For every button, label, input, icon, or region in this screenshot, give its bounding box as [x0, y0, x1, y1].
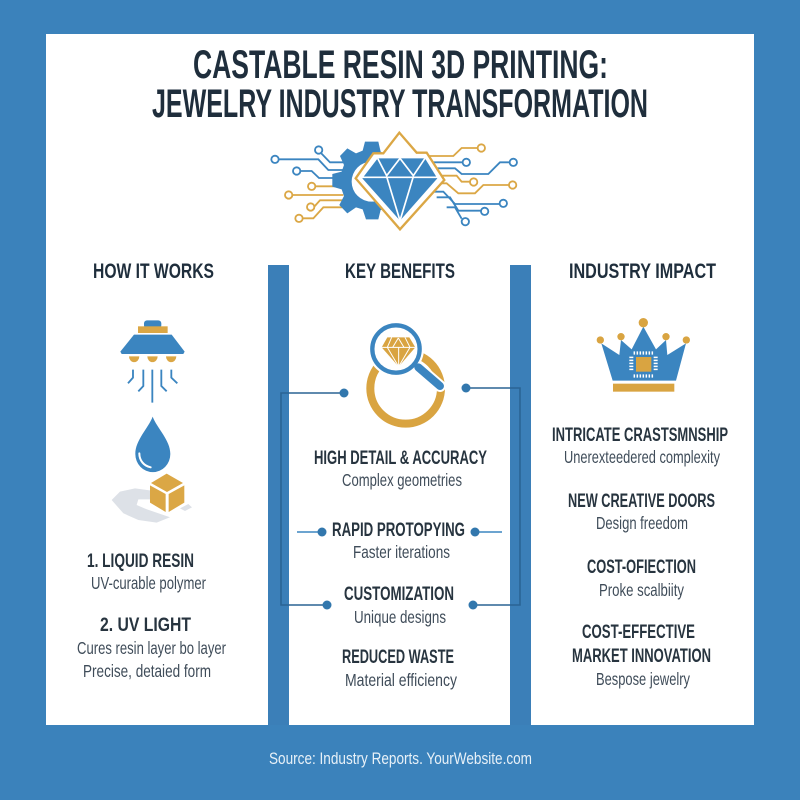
- text: how it works steps: UV-curable polymer: [91, 573, 206, 593]
- icon: uv lamp, resin drop and cube: [112, 320, 192, 523]
- text: industry impact list: Bespose jewelry: [596, 669, 690, 689]
- text: how it works steps: Cures resin layer bo layer: [77, 638, 226, 658]
- gold cube: [150, 474, 184, 512]
- gem: [361, 158, 439, 221]
- heading: key benefits: KEY BENEFITS: [345, 260, 455, 283]
- text: key benefits list: HIGH DETAIL & ACCURACY: [314, 447, 487, 469]
- gold circuit traces: [285, 144, 516, 222]
- icon: ring with magnifier: [368, 321, 441, 424]
- column divider right: [510, 265, 531, 725]
- text: industry impact list: Unerexteedered complexity: [564, 447, 720, 467]
- connector right: [462, 384, 520, 610]
- text: industry impact list: COST-OFIECTION: [587, 556, 696, 578]
- uv lamp: [120, 320, 185, 403]
- text: key benefits list: Material efficiency: [345, 670, 457, 690]
- magnifier: [368, 321, 424, 377]
- gear: [332, 142, 392, 219]
- gold ring: [370, 353, 441, 424]
- title: CASTABLE RESIN 3D PRINTING:: [193, 43, 608, 87]
- text: how it works steps: 2. UV LIGHT: [100, 614, 191, 636]
- text: industry impact list: NEW CREATIVE DOORS: [568, 490, 715, 512]
- column divider left: [268, 265, 289, 725]
- text: industry impact list: Design freedom: [596, 513, 688, 533]
- text: industry impact list: Proke scalbiity: [599, 580, 684, 600]
- text: how it works steps: Precise, detaied form: [83, 661, 211, 681]
- connector left: [281, 388, 348, 610]
- text: industry impact list: COST-EFFECTIVE: [582, 621, 695, 643]
- text: key benefits list: CUSTOMIZATION: [344, 583, 454, 605]
- text: key benefits list: [314, 447, 487, 690]
- text: key benefits list: REDUCED WASTE: [342, 646, 454, 668]
- text: how it works steps: [77, 550, 226, 681]
- small gold gem: [382, 337, 415, 367]
- text: key benefits list: Faster iterations: [353, 542, 450, 562]
- grey shadow: [112, 488, 192, 523]
- heading: how it works: HOW IT WORKS: [93, 260, 214, 283]
- icon: crown with chip: [597, 318, 690, 392]
- blue circuit traces: [271, 146, 517, 225]
- heading: industry impact: INDUSTRY IMPACT: [569, 260, 716, 283]
- text: industry impact list: MARKET INNOVATION: [572, 645, 711, 667]
- text: key benefits list: RAPID PROTOPYING: [332, 519, 465, 541]
- text: key benefits list: Complex geometries: [342, 470, 462, 490]
- icon: gear, diamond and circuit traces: [271, 133, 517, 229]
- diamond frame: [356, 133, 444, 229]
- text: key benefits list: Unique designs: [354, 607, 446, 627]
- title: [152, 43, 648, 126]
- text: industry impact list: [552, 424, 728, 689]
- source footer: Source: Industry Reports. YourWebsite.com: [269, 749, 532, 768]
- connector rapid prototyping: [297, 528, 502, 536]
- panel: white card: [46, 34, 754, 725]
- resin drop: [135, 417, 170, 472]
- text: how it works steps: 1. LIQUID RESIN: [87, 550, 194, 572]
